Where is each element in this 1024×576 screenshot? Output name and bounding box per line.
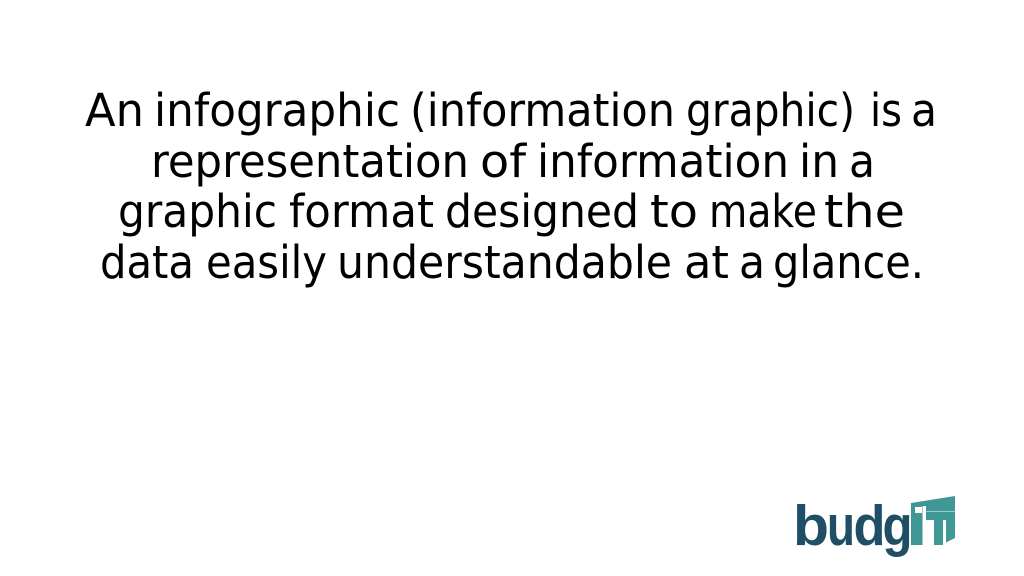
logo wordmark: d <box>854 494 886 558</box>
definition text block: data <box>100 236 194 289</box>
logo wordmark: g <box>882 494 912 558</box>
definition text block <box>85 84 937 289</box>
definition text block: graphic) <box>686 84 855 137</box>
logo: budgIT <box>793 494 955 558</box>
definition text block: graphic <box>118 185 277 238</box>
logo wordmark: b <box>793 494 829 558</box>
definition text block: format <box>289 185 434 238</box>
definition text block: representation <box>151 135 469 188</box>
definition text block: make <box>709 185 817 238</box>
definition text block: a <box>739 236 765 289</box>
definition text block: of <box>480 135 527 188</box>
definition text block: (information <box>410 84 675 137</box>
definition text block: glance. <box>773 236 924 289</box>
definition text block: the <box>824 185 905 238</box>
definition text block: An <box>85 84 144 137</box>
logo mark: iT <box>911 496 955 545</box>
definition text block: information <box>537 135 789 188</box>
definition text block: easily <box>206 236 327 289</box>
definition text block: a <box>849 135 875 188</box>
definition text block: at <box>684 236 729 289</box>
definition text block: a <box>911 84 937 137</box>
definition text block: is <box>870 84 902 137</box>
definition text block: designed <box>445 185 639 238</box>
definition text block: understandable <box>337 236 672 289</box>
definition text block: in <box>799 135 839 188</box>
definition text block: infographic <box>154 84 400 137</box>
logo wordmark: u <box>827 494 855 558</box>
logo wordmark <box>793 494 912 558</box>
definition text block: to <box>650 185 698 238</box>
